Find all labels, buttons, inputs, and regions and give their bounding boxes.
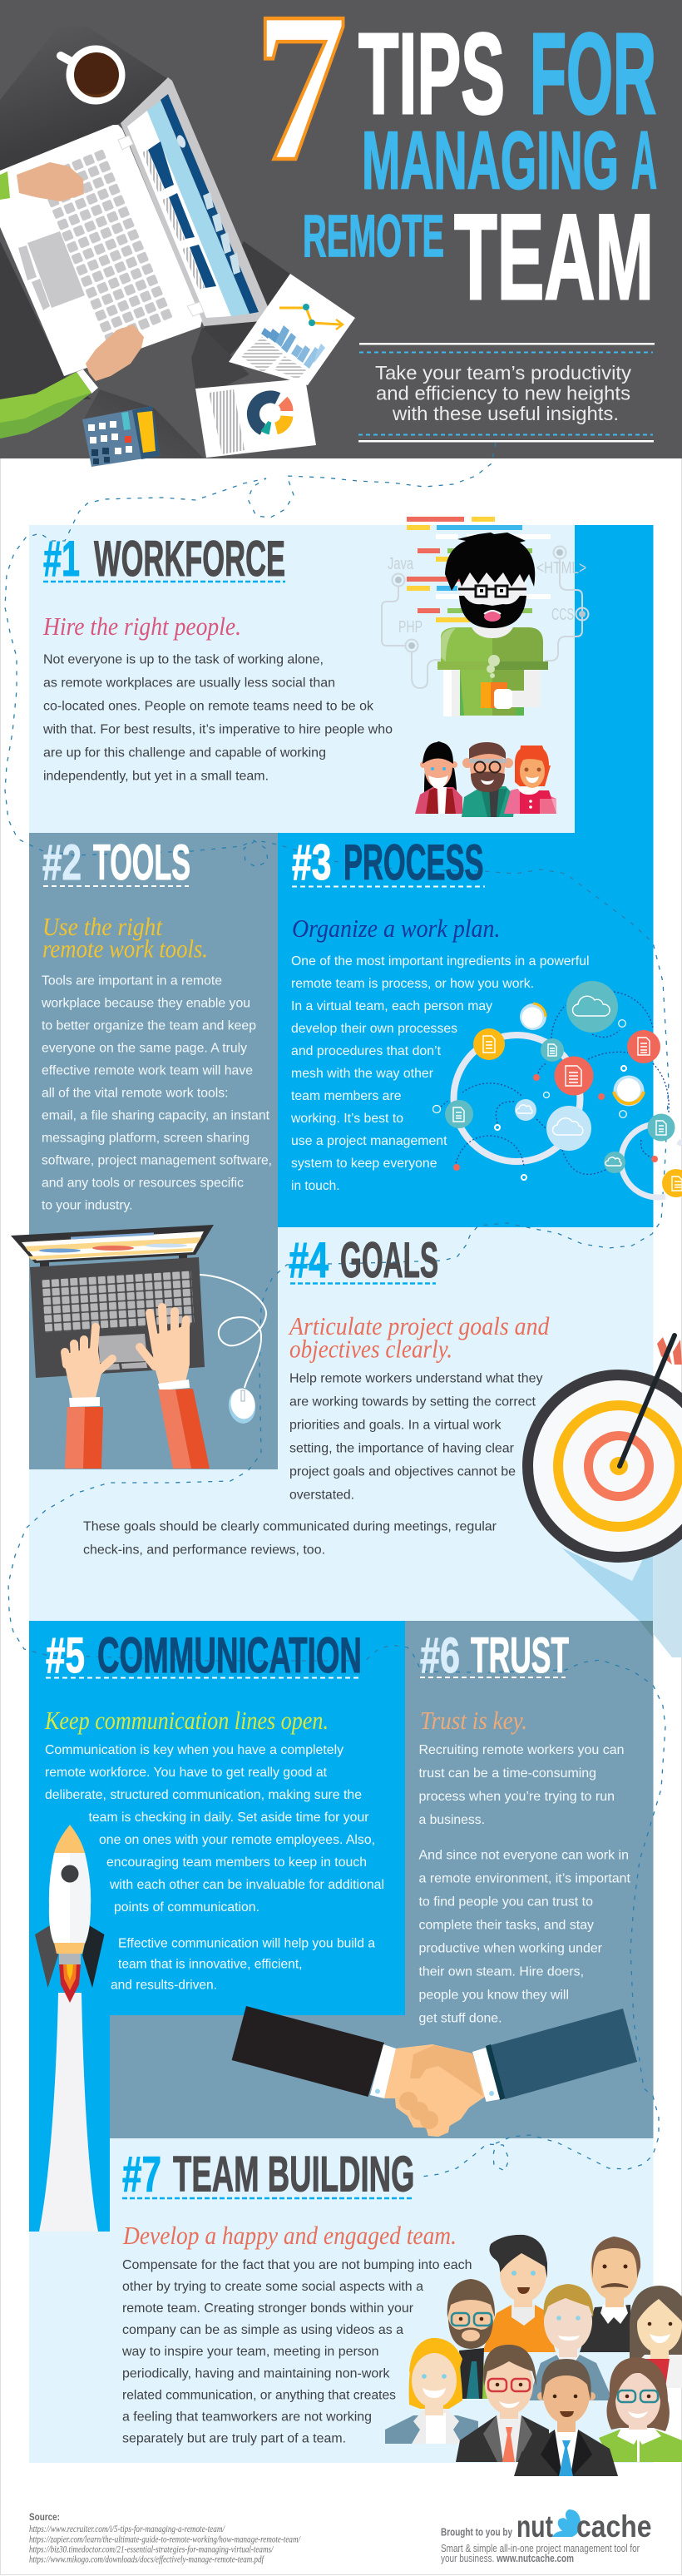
icon: squirrel	[552, 2509, 581, 2537]
panel backgrounds	[29, 525, 654, 2463]
heading: #1 workforce: WORKFORCE	[94, 531, 285, 587]
body text: These goals should be clearly communicated during meetings, regular	[83, 1519, 497, 1534]
dashed route connecting the sections	[5, 443, 669, 2177]
body text: encouraging team members to keep in touch	[106, 1855, 367, 1870]
body text: effective remote work team will have	[42, 1063, 253, 1078]
body text: get stuff done.	[419, 2012, 502, 2025]
body text: use a project management	[291, 1134, 447, 1148]
body text: are working towards by setting the correct	[289, 1395, 536, 1409]
subheading: Use the right	[42, 912, 163, 941]
body text: remote team. Creating stronger bonds within your	[122, 2301, 414, 2316]
body text: One of the most important ingredients in a powerful	[291, 954, 589, 968]
heading: #2 tools	[42, 835, 190, 890]
body text: points of communication.	[114, 1900, 259, 1915]
panel: #4 goals	[83, 1232, 682, 1563]
panel: #7 team building	[121, 2147, 682, 2476]
person: man with moustache	[580, 2237, 640, 2352]
body text: working. It’s best to	[290, 1112, 403, 1126]
heading: #3 process: PROCESS	[343, 835, 484, 890]
subheading: Articulate project goals and	[288, 1311, 550, 1340]
body text: to find people you can trust to	[419, 1895, 593, 1909]
icon: coffee cup	[61, 45, 125, 105]
glasses	[476, 586, 507, 597]
panel: #5 communication	[35, 1627, 384, 2232]
icon: chart sheet	[229, 274, 355, 385]
footer: sources: Source:	[29, 2511, 60, 2523]
illustration: team of nine people	[385, 2235, 682, 2476]
illustration: target with arrow	[522, 1335, 682, 1563]
body text: project goals and objectives cannot be	[289, 1464, 516, 1479]
logo: nutcache: cache	[576, 2509, 652, 2544]
heading: #5 communication	[46, 1627, 362, 1683]
subheading: Keep communication lines open.	[44, 1706, 329, 1735]
body text: productive when working under	[419, 1942, 603, 1955]
body text: a feeling that teamworkers are not working	[122, 2410, 372, 2425]
footer: sources: https://zapier.com/learn/the-ultimate-guide-to-remote-working/how-manage-remote-team/	[29, 2534, 301, 2544]
subheading	[42, 912, 208, 964]
heading: #6 trust: TRUST	[471, 1627, 569, 1683]
body text: software, project management software,	[42, 1153, 272, 1168]
body text: in touch.	[291, 1179, 339, 1193]
body text: Recruiting remote workers you can	[419, 1743, 624, 1757]
body text: Tools are important in a remote	[42, 973, 222, 988]
body text: team members are	[291, 1089, 402, 1103]
body text: remote team is process, or how you work.	[291, 977, 534, 991]
subheading: objectives clearly.	[289, 1335, 452, 1363]
body text: email, a file sharing capacity, an instant	[42, 1108, 270, 1123]
person: bearded man with glasses	[447, 2279, 495, 2399]
body text: deliberate, structured communication, making sure the	[45, 1788, 362, 1802]
illustration: rocket with smoke trail	[35, 1825, 105, 2232]
icon: laptop	[0, 77, 271, 376]
body text: all of the vital remote work tools:	[42, 1087, 228, 1100]
body text	[419, 1743, 631, 2025]
illustration: developer with code lines: <HTML>	[536, 559, 586, 577]
body text	[290, 954, 589, 1193]
body text	[41, 973, 272, 1213]
body text	[121, 2258, 472, 2446]
body text: Effective communication will help you build a	[118, 1937, 375, 1950]
body text: remote workforce. You have to get really good at	[45, 1766, 328, 1780]
illustration: developer with code lines: Java	[388, 555, 414, 573]
subheading: Trust is key.	[420, 1706, 527, 1735]
shirt	[441, 627, 492, 716]
body text: Communication is key when you have a completely	[45, 1743, 343, 1757]
heading: #5 communication: COMMUNICATION	[97, 1627, 362, 1683]
title	[255, 0, 657, 324]
body text: process when you’re trying to run	[419, 1790, 615, 1804]
body text: to your industry.	[42, 1198, 133, 1213]
panel: #1 workforce	[42, 517, 589, 817]
body text: And since not everyone can work in	[419, 1849, 629, 1862]
arms and mug	[443, 670, 460, 716]
subtitle with rules: with these useful insights.	[392, 403, 619, 424]
panel: #2 tools	[11, 835, 272, 1469]
heading: #2 tools: #2	[42, 835, 82, 890]
heading: #4 goals: #4	[289, 1232, 329, 1288]
body text: Not everyone is up to the task of working alone,	[43, 652, 324, 667]
icon: lower hand and green sleeve	[0, 324, 144, 438]
body text: to better organize the team and keep	[42, 1018, 256, 1033]
body text: are up for this challenge and capable of working	[43, 746, 326, 760]
neck and face	[472, 627, 513, 638]
subheading: remote work tools.	[42, 934, 208, 964]
person: man in front with blue tie	[514, 2359, 618, 2476]
logo: nutcache	[516, 2509, 652, 2544]
body text: a business.	[419, 1813, 485, 1827]
illustration: developer with code lines: PHP	[398, 618, 423, 637]
body text: as remote workplaces are usually less social than	[43, 676, 335, 691]
illustration: three teammates	[415, 741, 556, 817]
heading: #7 team building: #7	[122, 2147, 161, 2202]
panel: #3 process	[290, 835, 682, 1197]
body text: check-ins, and performance reviews, too.	[83, 1543, 325, 1558]
person: blonde woman	[385, 2338, 478, 2444]
target shadow	[561, 1539, 682, 1657]
hair	[445, 533, 535, 591]
subheading: Hire the right people.	[42, 612, 241, 641]
body text: everyone on the same page. A truly	[42, 1042, 247, 1055]
icon: calculator	[82, 406, 160, 467]
body text: co-located ones. People on remote teams need to be ok	[43, 699, 374, 714]
body text: periodically, having and maintaining non-work	[122, 2366, 390, 2381]
person: blond man	[528, 2284, 613, 2400]
footer: sources: https://www.mikogo.com/downloads/docs/effectively-manage-remote-team.pdf	[29, 2554, 264, 2564]
body text: team that is innovative, efficient,	[118, 1957, 303, 1972]
person: man with dark hair	[482, 2235, 556, 2352]
footer: nutcache brand	[441, 2509, 652, 2564]
body text: setting, the importance of having clear	[289, 1441, 515, 1456]
body text: complete their tasks, and stay	[419, 1919, 594, 1932]
heading: #3 process: #3	[292, 835, 331, 890]
cable and mouse	[200, 1275, 266, 1388]
illustration: handshake	[232, 2006, 637, 2137]
body text	[83, 1371, 542, 1558]
body text: system to keep everyone	[291, 1157, 437, 1171]
icon: donut chart sheet	[195, 379, 316, 458]
person: woman with teal glasses	[599, 2357, 682, 2462]
body text	[42, 652, 393, 784]
body text: their own steam. Hire doers,	[419, 1965, 584, 1979]
body text: separately but are truly part of a team.	[122, 2431, 346, 2446]
title: TIPS	[358, 10, 505, 138]
footer: sources: https://biz30.timedoctor.com/21-essential-strategies-for-managing-virtual-teams/	[29, 2544, 274, 2554]
panel: #6 trust	[232, 1627, 637, 2137]
body text: one on ones with your remote employees. Also,	[99, 1833, 375, 1847]
footer: sources	[29, 2511, 301, 2564]
illustration: laptop with typing hands	[11, 1225, 266, 1469]
panel: header	[0, 0, 682, 467]
body text: a remote environment, it’s important	[419, 1872, 631, 1885]
body text: messaging platform, screen sharing	[42, 1132, 250, 1145]
body text: develop their own processes	[291, 1022, 457, 1036]
body text: trust can be a time-consuming	[419, 1766, 596, 1781]
subheading: Develop a happy and engaged team.	[122, 2221, 457, 2250]
person: man with red glasses	[456, 2345, 549, 2462]
subtitle with rules: and efficiency to new heights	[376, 383, 630, 404]
body text: and procedures that don’t	[291, 1044, 442, 1058]
body text: company can be as simple as using videos as a	[122, 2323, 403, 2337]
illustration: developer with code lines	[382, 517, 589, 716]
heading: #3 process	[292, 835, 485, 890]
body text: workplace because they enable you	[41, 997, 250, 1010]
body text: priorities and goals. In a virtual work	[289, 1418, 502, 1433]
body text: In a virtual team, each person may	[291, 999, 492, 1013]
person: woman with dark hair	[629, 2286, 682, 2388]
heading: #1 workforce: #1	[43, 531, 80, 587]
subtitle with rules: Take your team’s productivity	[375, 362, 632, 384]
footer: sources: https://www.recruiter.com/i/5-tips-for-managing-a-remote-team/	[29, 2524, 225, 2534]
body text: independently, but yet in a small team.	[43, 769, 269, 784]
heading: #7 team building	[122, 2147, 414, 2202]
subheading: Organize a work plan.	[292, 914, 501, 943]
heading: #7 team building: TEAM BUILDING	[173, 2147, 414, 2202]
heading: #4 goals	[289, 1232, 438, 1288]
heading: #2 tools: TOOLS	[93, 835, 190, 890]
body text: with that. For best results, it’s imperative to hire people who	[42, 722, 393, 737]
body text: team is checking in daily. Set aside time for your	[88, 1811, 369, 1825]
illustration: developer with code lines: CCS	[551, 606, 574, 624]
body text: and any tools or resources specific	[42, 1177, 244, 1190]
heading: #1 workforce	[43, 531, 285, 587]
heading: #5 communication: #5	[46, 1627, 85, 1683]
heading: #6 trust: #6	[420, 1627, 460, 1683]
body text: related communication, or anything that creates	[122, 2388, 396, 2403]
illustration: connected cloud network	[432, 981, 682, 1197]
body text: and results-driven.	[111, 1979, 217, 1992]
footer: nutcache brand: Brought to you by	[441, 2526, 513, 2538]
body text: with each other can be invaluable for additional	[109, 1878, 384, 1892]
body text: people you know they will	[419, 1989, 569, 2002]
body text: other by trying to create some social aspects with a	[122, 2280, 423, 2294]
footer: nutcache brand: your business. www.nutcache.com	[441, 2553, 574, 2564]
body text: overstated.	[289, 1488, 354, 1503]
body text: Compensate for the fact that you are not bumping into each	[122, 2258, 472, 2272]
body text: way to inspire your team, meeting in person	[121, 2345, 379, 2359]
footer: nutcache brand: Smart & simple all-in-one project management tool for	[441, 2543, 640, 2554]
body text	[45, 1743, 384, 1992]
icon: top hand on keyboard	[0, 162, 84, 201]
title: REMOTE	[303, 204, 444, 270]
logo: nutcache: nut	[516, 2509, 553, 2544]
long shadows behind the desk items	[0, 27, 291, 458]
heading: #4 goals: GOALS	[340, 1232, 438, 1288]
body text: mesh with the way other	[291, 1067, 434, 1081]
hands	[65, 1307, 186, 1373]
heading: #6 trust	[420, 1627, 569, 1683]
subheading	[288, 1311, 550, 1363]
subtitle with rules	[358, 343, 655, 443]
body text: Help remote workers understand what they	[289, 1371, 542, 1386]
